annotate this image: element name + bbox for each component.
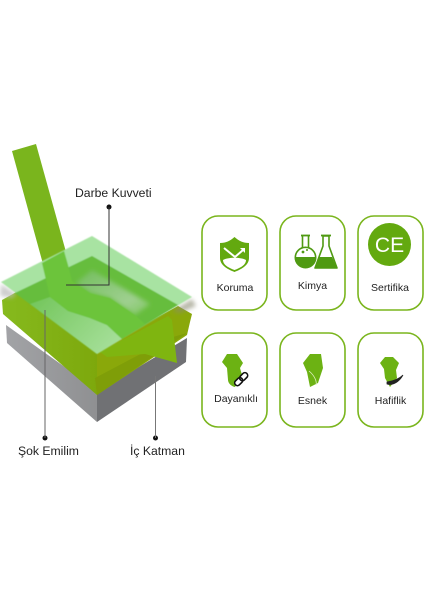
arrow head xyxy=(100,316,177,363)
inner grey layer xyxy=(6,325,187,422)
icon: sole with feather xyxy=(380,357,403,387)
icon: flasks xyxy=(295,236,337,268)
label: Ic Katman xyxy=(130,376,185,458)
icon: sole with chain xyxy=(222,354,249,387)
card: Sertifika: Sertifika xyxy=(371,282,409,294)
card: Kimya: Kimya xyxy=(298,280,327,292)
label: Ic Katman: İç Katman xyxy=(130,444,185,458)
icon: CE mark: CE xyxy=(375,234,404,257)
card: Hafiflik: Hafiflik xyxy=(375,395,407,407)
card: Koruma: Koruma xyxy=(217,282,254,294)
card: Dayanikli: Dayanıklı xyxy=(214,393,258,405)
label: Sok Emilim: Şok Emilim xyxy=(18,444,79,458)
plate shadow xyxy=(0,284,196,313)
icon: shield xyxy=(220,237,249,272)
card: Hafiflik xyxy=(358,333,423,427)
card: Kimya xyxy=(280,216,345,310)
impact arrow shaft xyxy=(12,144,66,264)
card: Esnek xyxy=(280,333,345,427)
layered impact diagram xyxy=(0,144,196,458)
icon: flexible sole xyxy=(303,354,323,387)
card: Esnek: Esnek xyxy=(298,395,328,407)
label: Darbe Kuvveti: Darbe Kuvveti xyxy=(75,186,152,200)
translucent top plate xyxy=(1,236,192,354)
card: Koruma xyxy=(202,216,267,310)
card: Sertifika xyxy=(358,216,423,310)
arrow shaft seen through plate xyxy=(42,251,145,339)
label: Darbe Kuvveti xyxy=(66,186,152,285)
label: Sok Emilim xyxy=(18,310,79,458)
card: Dayanikli xyxy=(202,333,267,427)
shock absorbing green layer xyxy=(2,290,192,395)
